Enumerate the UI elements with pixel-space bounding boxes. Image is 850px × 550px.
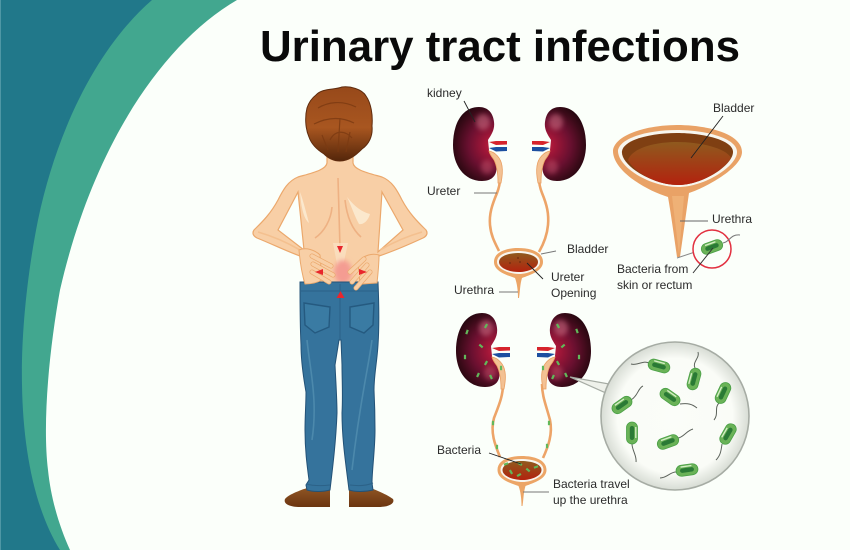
- bacterium 4: [658, 386, 682, 408]
- bacterium 9: [675, 463, 699, 477]
- red pain arrows: [315, 246, 367, 298]
- bacterium 7: [656, 433, 680, 451]
- bacterium 2: [686, 367, 702, 391]
- inflamed lower back: [334, 260, 352, 284]
- left kidney: [453, 107, 507, 183]
- infected bladder: [498, 456, 546, 506]
- bacterium 5: [610, 394, 634, 416]
- decorative teal and green curved side bands: [0, 0, 237, 550]
- figure: man seen from behind with lower back pain: [253, 87, 427, 507]
- jeans pockets: [304, 303, 374, 333]
- hair: [306, 87, 372, 161]
- labels: healthy urinary system: [427, 86, 608, 300]
- labels: infected urinary system: Bacteria travel: [553, 477, 630, 491]
- bacterium 6: [626, 422, 638, 444]
- red detail in bladder: [509, 257, 521, 264]
- bacterium 8: [718, 422, 738, 446]
- jeans: [300, 282, 379, 492]
- diagram: healthy urinary system: [453, 107, 586, 298]
- bacterium 1: [647, 358, 671, 374]
- bacterium in red circle: [693, 230, 740, 273]
- left hand: [299, 249, 333, 284]
- title: Urinary tract infections: [260, 22, 740, 71]
- labels: healthy urinary system: kidney: [427, 86, 462, 100]
- back shading: [258, 178, 422, 250]
- infected right kidney: [537, 313, 591, 389]
- labels and bacterium callout: enlarged bladder: Bacteria from: [617, 262, 688, 276]
- infected left kidney: [456, 313, 510, 389]
- green bacteria specks: [464, 324, 580, 477]
- shoes: [285, 488, 330, 507]
- labels: healthy urinary system: Ureter: [551, 270, 584, 284]
- bacterium 3: [713, 381, 733, 405]
- right hand: [350, 254, 379, 288]
- labels and bacterium callout: enlarged bladder: Bladder: [713, 101, 754, 115]
- labels: healthy urinary system: Bladder: [567, 242, 608, 256]
- right kidney: [532, 107, 586, 183]
- small bladder: [494, 248, 543, 298]
- labels: healthy urinary system: Urethra: [454, 283, 494, 297]
- diagram: enlarged bladder with urethra: [613, 125, 742, 257]
- ureters: [490, 178, 548, 252]
- diagram: infected urinary system: [456, 313, 591, 506]
- labels: infected urinary system: up the urethra: [553, 493, 628, 507]
- labels: infected urinary system: [437, 443, 630, 507]
- labels: healthy urinary system: Ureter: [427, 184, 460, 198]
- labels: healthy urinary system: Opening: [551, 286, 596, 300]
- labels: infected urinary system: Bacteria: [437, 443, 481, 457]
- labels and bacterium callout: enlarged bladder: [617, 101, 754, 292]
- torso and arms: [253, 150, 427, 286]
- labels and bacterium callout: enlarged bladder: Urethra: [712, 212, 752, 226]
- labels and bacterium callout: enlarged bladder: skin or rectum: [617, 278, 692, 292]
- infected ureters: [493, 384, 551, 458]
- magnified circle of bacteria: [570, 342, 749, 490]
